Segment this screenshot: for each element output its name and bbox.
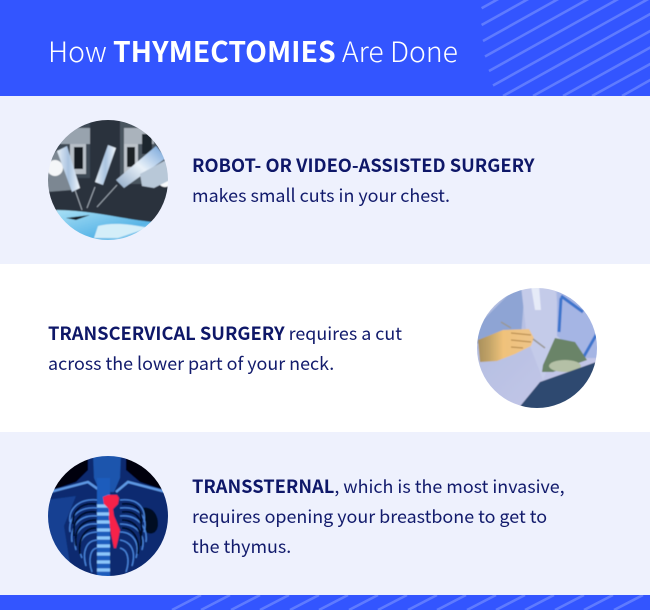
icon: thymus x-ray image [48, 456, 168, 576]
title: How THYMECTOMIES Are Done [48, 30, 458, 71]
header band [0, 0, 650, 96]
text: transsternal: the thymus. [192, 533, 291, 559]
text: transcervical surgery: across the lower part of your neck. [48, 350, 334, 376]
text: transsternal: requires opening your breastbone to get to [192, 503, 547, 529]
text: robot- or video-assisted surgery: ROBOT- OR VIDEO-ASSISTED SURGERY [192, 152, 534, 178]
icon: robotic surgery photo [48, 120, 168, 240]
text: transsternal: TRANSSTERNAL, which is the most invasive, [192, 473, 565, 499]
text: transcervical surgery: TRANSCERVICAL SURGERY requires a cut [48, 320, 402, 346]
footer band [0, 595, 650, 610]
panel: transsternal [0, 432, 650, 595]
text: transsternal [192, 473, 565, 559]
icon: surgeon photo [477, 288, 597, 408]
text: robot- or video-assisted surgery [192, 152, 535, 208]
text: robot- or video-assisted surgery: makes small cuts in your chest. [192, 182, 450, 208]
panel: transcervical surgery [48, 288, 597, 408]
text: transcervical surgery [48, 320, 402, 376]
panel: robot- or video-assisted surgery [0, 96, 650, 264]
